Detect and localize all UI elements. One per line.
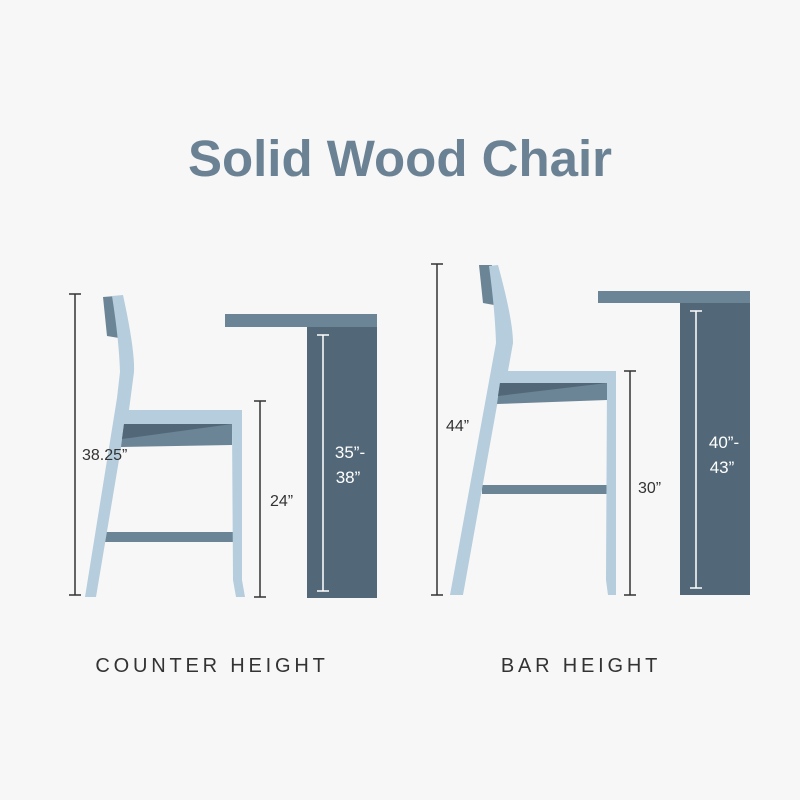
dimension: chair height 38.25 bbox=[69, 294, 81, 595]
counter height group: 24” bbox=[270, 493, 293, 510]
dimension: chair height 44 bbox=[431, 264, 443, 595]
bar table bbox=[598, 291, 750, 595]
bar height group: 40”- bbox=[709, 433, 739, 452]
dimension: table 35-38 bbox=[317, 335, 329, 591]
counter height group: 38” bbox=[336, 468, 361, 487]
bar chair bbox=[450, 265, 616, 595]
counter height group: 38.25” bbox=[82, 447, 127, 464]
counter height group bbox=[69, 294, 377, 677]
label: counter height: COUNTER HEIGHT bbox=[95, 655, 329, 677]
bar height group: 43” bbox=[710, 458, 735, 477]
label: bar height: BAR HEIGHT bbox=[501, 655, 661, 677]
bar height group: 44” bbox=[446, 418, 469, 435]
dimension: seat 24 bbox=[254, 401, 266, 597]
counter chair bbox=[85, 295, 245, 597]
counter height group: 35”- bbox=[335, 443, 365, 462]
dimension: seat 30 bbox=[624, 371, 636, 595]
bar height group bbox=[431, 264, 750, 677]
bar height group: 30” bbox=[638, 480, 661, 497]
counter table bbox=[225, 314, 377, 598]
dimension: table 40-43 bbox=[690, 311, 702, 588]
title: Solid Wood Chair bbox=[188, 130, 612, 187]
